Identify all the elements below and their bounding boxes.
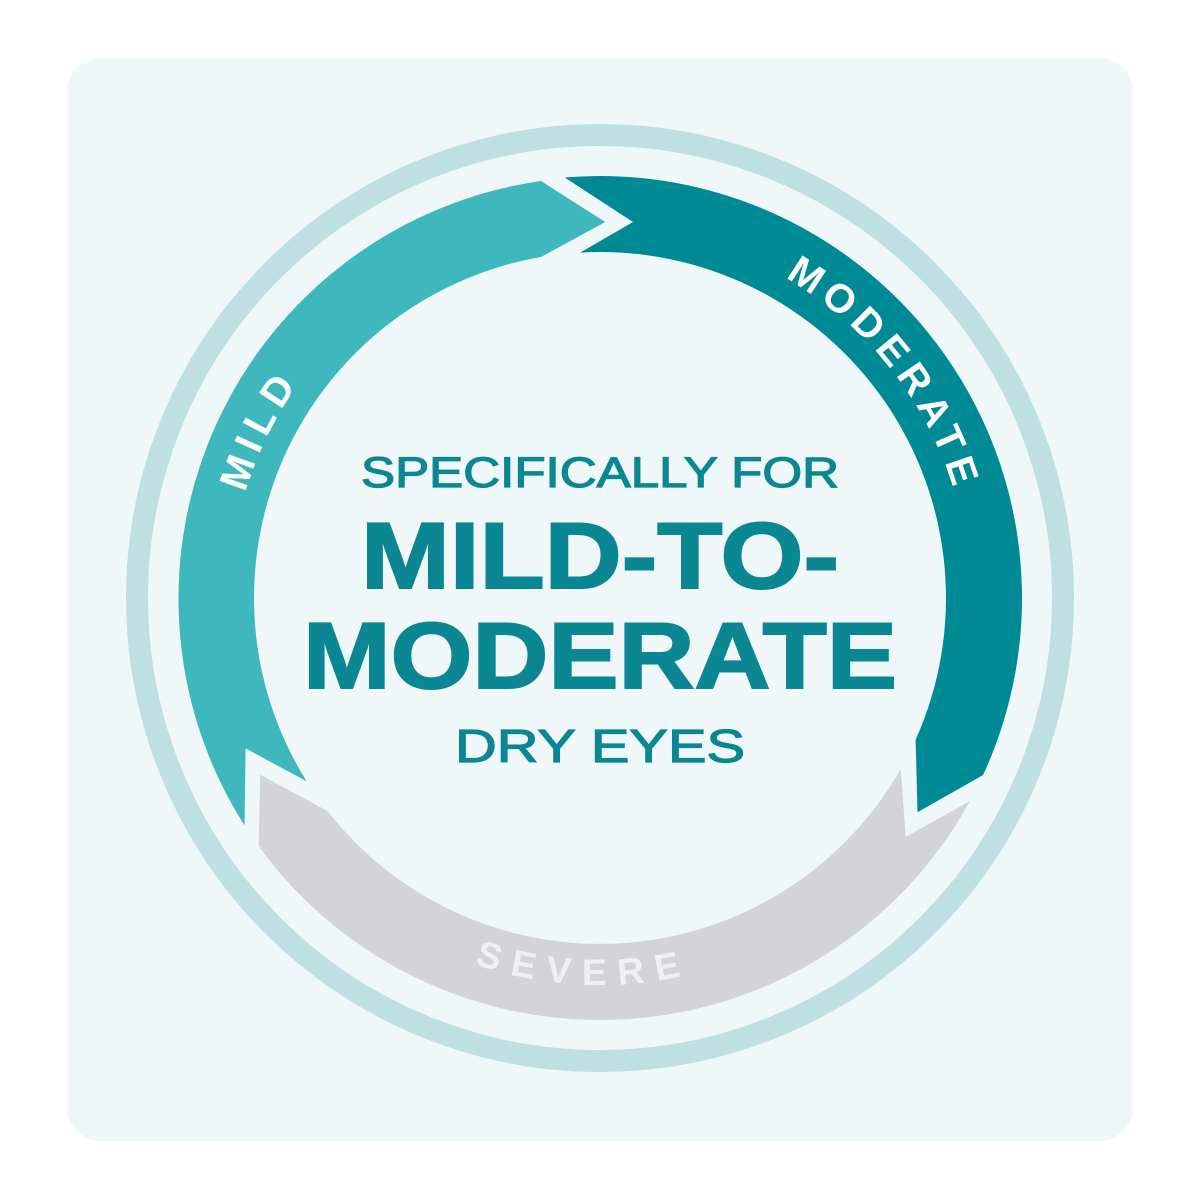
- arrow: mild: [178, 181, 606, 826]
- text: dry eyes: DRY EYES: [455, 720, 745, 772]
- center text block: [303, 449, 897, 772]
- arrow: moderate: [564, 176, 1022, 812]
- arrow: severe (gray): [258, 769, 970, 1020]
- outer ring: [137, 135, 1063, 1061]
- text: moderate: MODERATE: [303, 603, 897, 708]
- text: mild-to-: MILD-TO-: [361, 503, 839, 608]
- label: MILD: MILD: [220, 377, 291, 490]
- label: MODERATE: MODERATE: [788, 256, 978, 486]
- label: SEVERE: SEVERE: [477, 942, 680, 985]
- text: specifically for: SPECIFICALLY FOR: [361, 449, 839, 497]
